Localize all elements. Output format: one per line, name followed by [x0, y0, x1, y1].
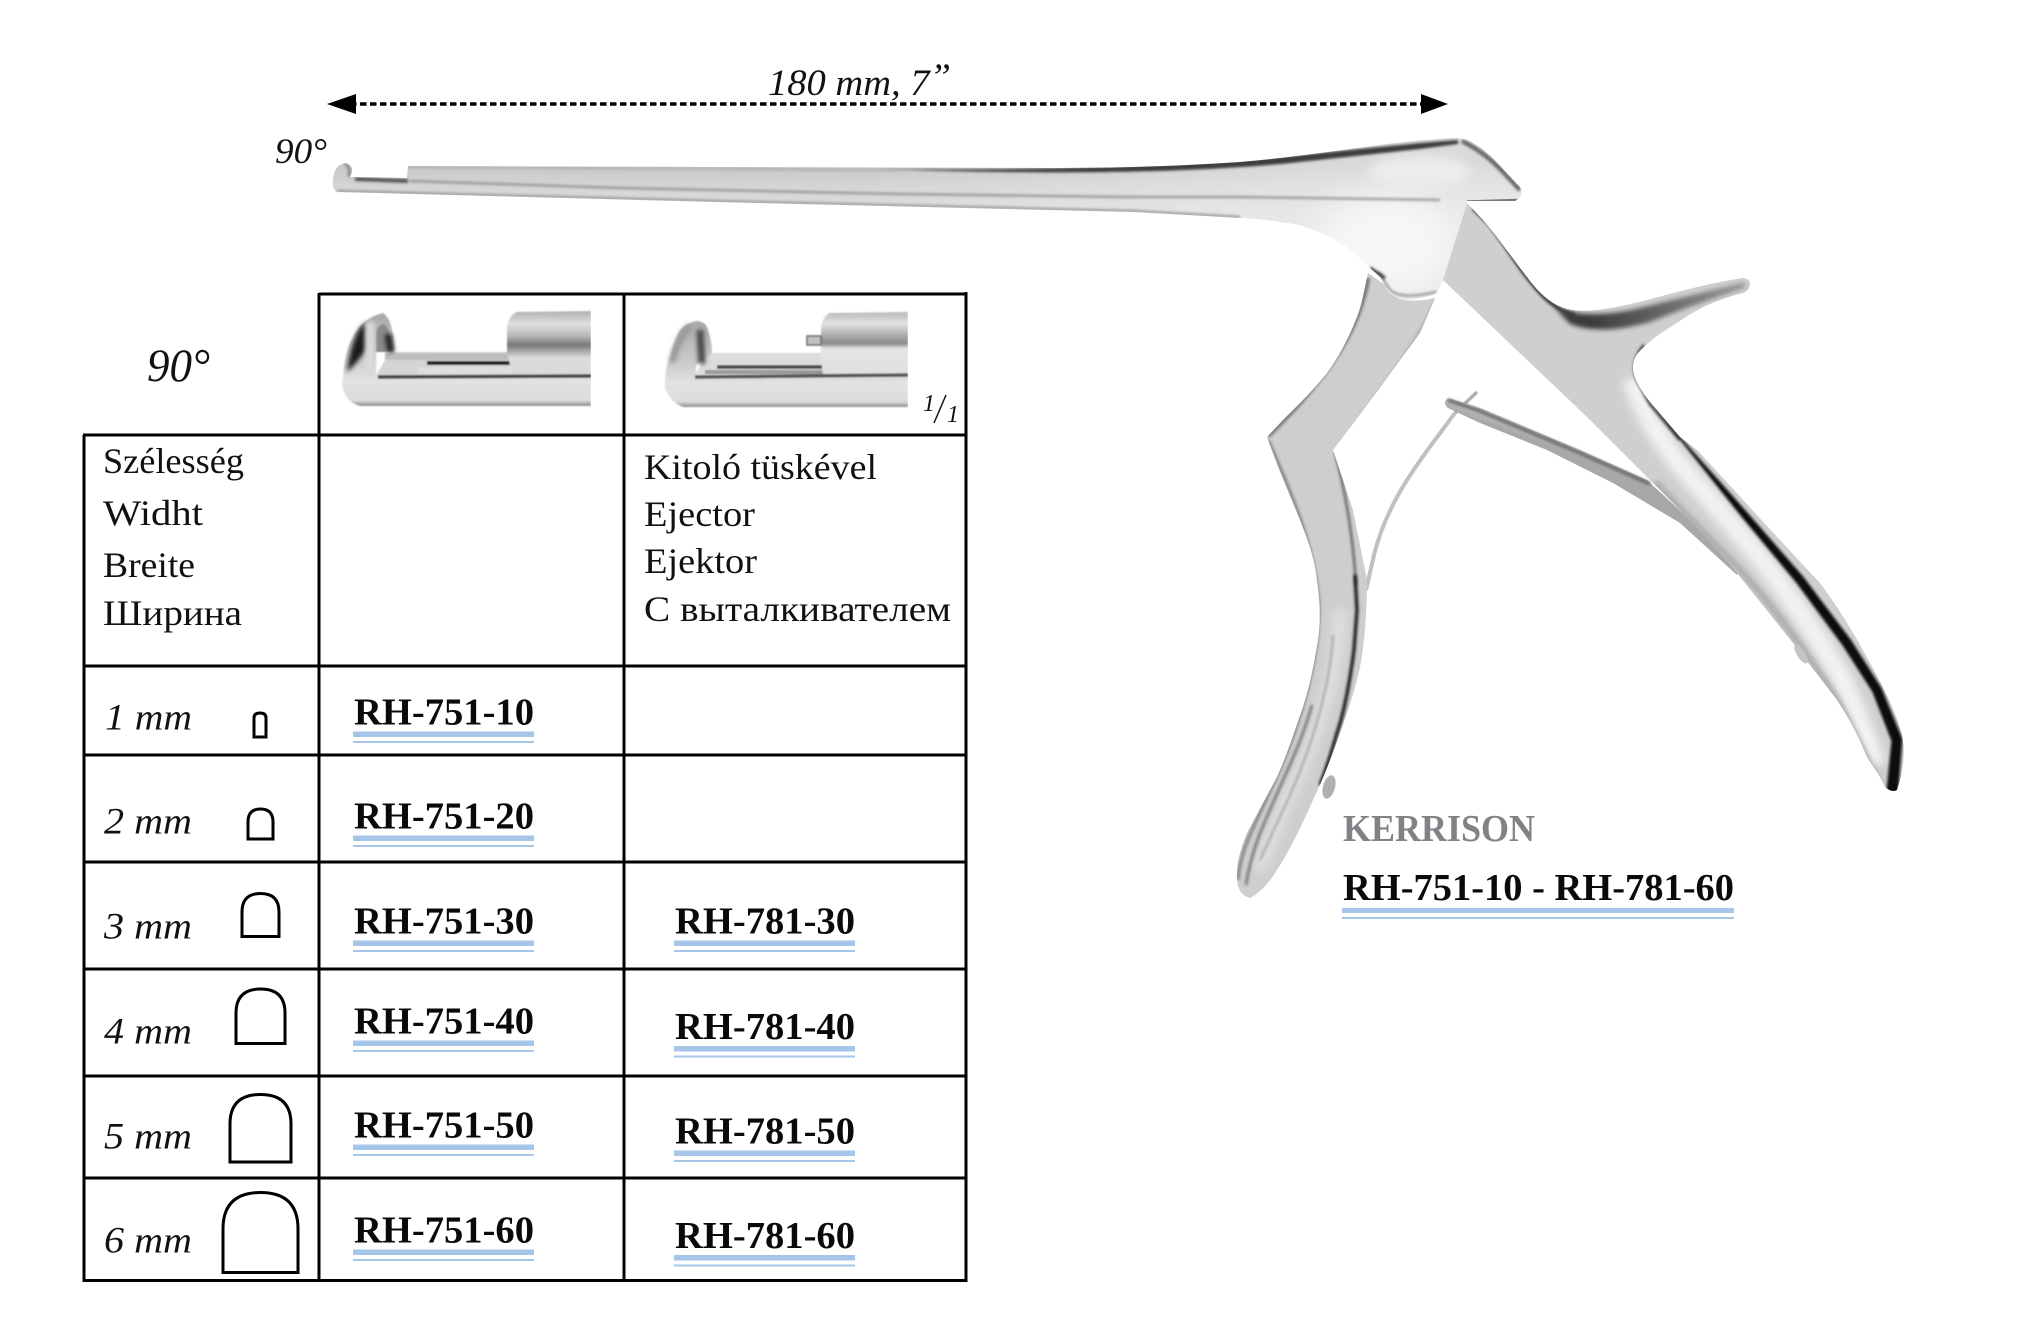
dimension label: 180 mm, 7	[768, 63, 923, 104]
row: 5 mm: 5 mm	[104, 1116, 192, 1158]
row: 4 mm: 4 mm	[104, 1012, 192, 1052]
row: 5 mm: RH-751-50	[354, 1104, 534, 1146]
row: 3 mm: RH-781-30	[675, 900, 855, 942]
scale note: 1	[923, 391, 935, 417]
row: 5 mm: RH-781-50	[675, 1110, 855, 1152]
left handle	[1236, 273, 1435, 898]
row: 6 mm: RH-751-60	[354, 1210, 534, 1252]
dimension label: ”	[930, 57, 951, 98]
scale note	[923, 391, 959, 428]
column label: ejector	[644, 447, 951, 629]
angle label: top: 90°	[275, 131, 327, 171]
column label: ejector: Ejector	[644, 494, 755, 534]
row: 6 mm	[104, 1192, 855, 1272]
table grid	[83, 292, 967, 1282]
column label: width: Szélesség	[103, 441, 244, 481]
row: 4 mm	[104, 989, 855, 1058]
angle label: table: 90°	[147, 340, 210, 392]
column label: width: Widht	[103, 493, 203, 533]
column label: ejector: Ejektor	[644, 541, 757, 581]
shaft and cutting head	[325, 130, 1540, 305]
arrowhead: left	[327, 94, 356, 114]
dimension: overall length arrow	[327, 57, 1448, 114]
column label: ejector: С выталкивателем	[644, 589, 951, 629]
column label: width	[103, 441, 244, 633]
arrowhead: right	[1421, 94, 1448, 114]
instrument photo: Kerrison rongeur	[325, 130, 1940, 915]
row: 1 mm	[105, 692, 534, 743]
row: 3 mm	[103, 894, 855, 952]
row: 2 mm: RH-751-20	[354, 796, 534, 838]
column label: ejector: Kitoló tüskével	[644, 447, 877, 487]
row: 4 mm: RH-781-40	[675, 1006, 855, 1048]
right handle	[1443, 203, 1904, 791]
table: order codes	[83, 292, 967, 1282]
product code range: RH-751-10 - RH-781-60	[1343, 867, 1734, 909]
row: 2 mm: 2 mm	[104, 802, 192, 842]
row: 3 mm: RH-751-30	[354, 900, 534, 942]
row: 4 mm: RH-751-40	[354, 1000, 534, 1042]
row: 5 mm	[104, 1094, 855, 1162]
row: 2 mm	[104, 796, 534, 847]
column label: width: Ширина	[103, 593, 242, 633]
rivet: right	[1792, 643, 1810, 665]
tip photo: with ejector	[665, 312, 908, 407]
tip photo: standard	[342, 311, 591, 406]
row: 6 mm: RH-781-60	[675, 1215, 855, 1257]
row: 3 mm: 3 mm	[103, 906, 192, 948]
scale note: 1	[947, 402, 959, 428]
product name: KERRISON	[1343, 808, 1535, 850]
column label: width: Breite	[103, 545, 195, 585]
rivet: left	[1320, 774, 1338, 800]
row: 1 mm: RH-751-10	[354, 692, 534, 734]
spring	[1366, 392, 1740, 590]
row: 1 mm: 1 mm	[105, 698, 192, 738]
row: 6 mm: 6 mm	[104, 1220, 192, 1262]
